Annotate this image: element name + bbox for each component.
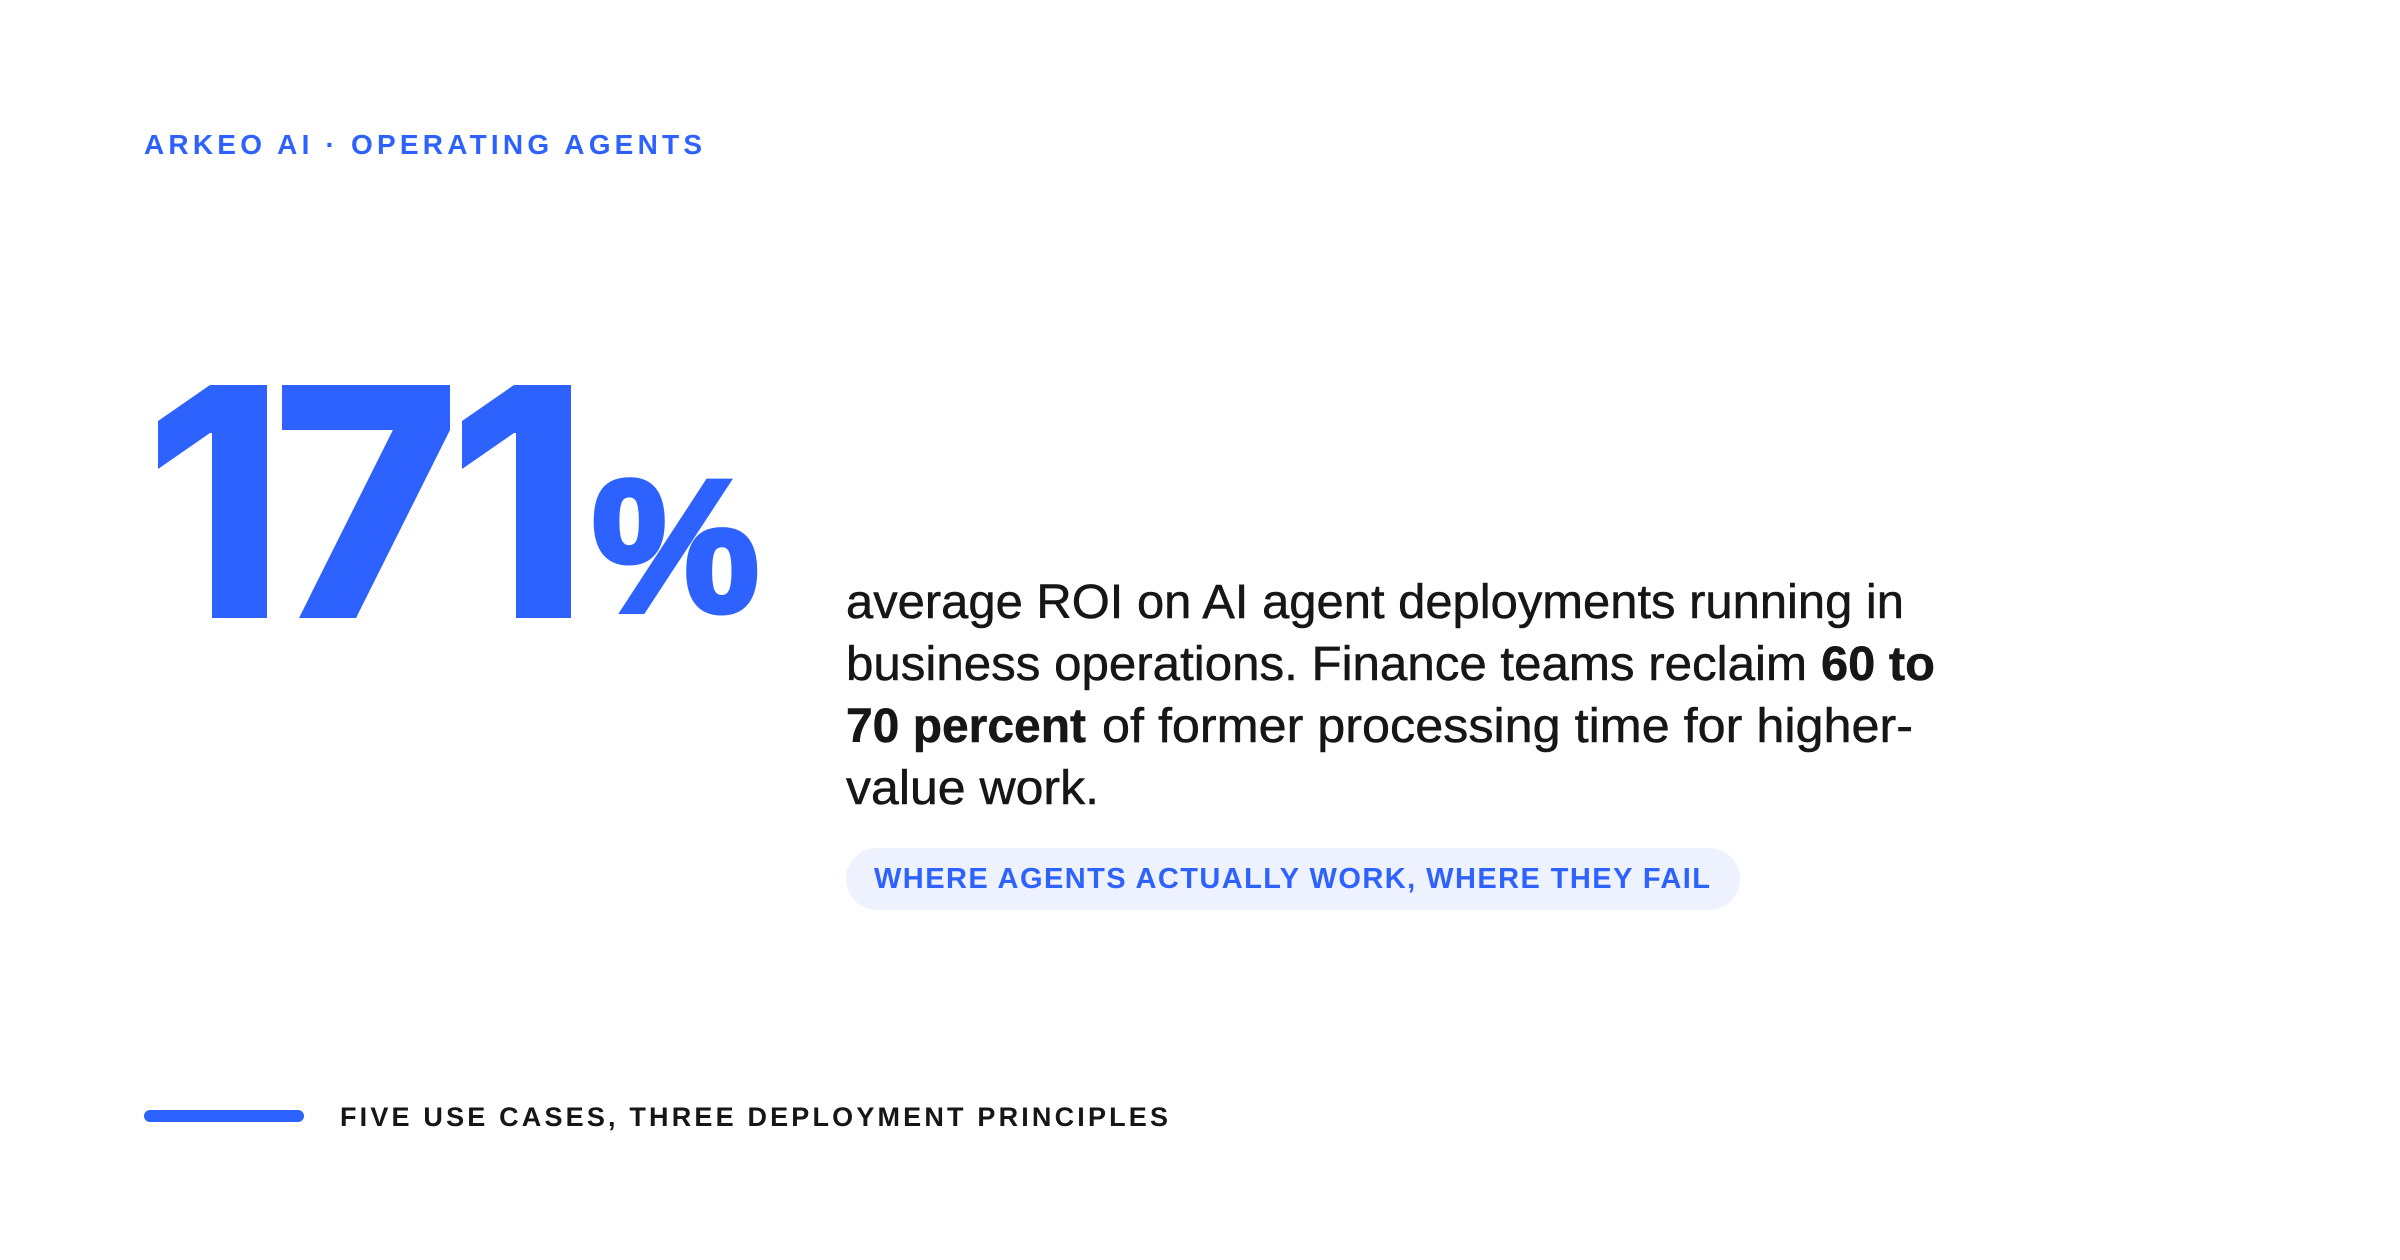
body paragraph: value work. <box>846 762 1099 815</box>
tag pill <box>846 848 1740 910</box>
body paragraph: business operations. Finance teams reclaim <box>846 638 1807 691</box>
body paragraph <box>846 576 1935 815</box>
eyebrow label: ARKEO AI · OPERATING AGENTS <box>144 129 702 160</box>
big stat: 171%: 1 <box>139 315 325 689</box>
footer accent bar <box>144 1110 304 1122</box>
body paragraph: of former processing time for higher- <box>1102 700 1913 753</box>
body paragraph: 70 percent <box>846 700 1086 753</box>
big stat: 171%: 1 <box>443 315 629 689</box>
tag pill: WHERE AGENTS ACTUALLY WORK, WHERE THEY FAIL <box>874 863 1710 895</box>
big stat: 171%: 7 <box>262 315 448 689</box>
footer caption: FIVE USE CASES, THREE DEPLOYMENT PRINCIPLES <box>340 1102 1168 1132</box>
big stat: 171%: % <box>592 441 759 651</box>
body paragraph: average ROI on AI agent deployments running in <box>846 576 1904 629</box>
body paragraph: 60 to <box>1821 638 1935 691</box>
big stat: 171% <box>158 385 758 618</box>
